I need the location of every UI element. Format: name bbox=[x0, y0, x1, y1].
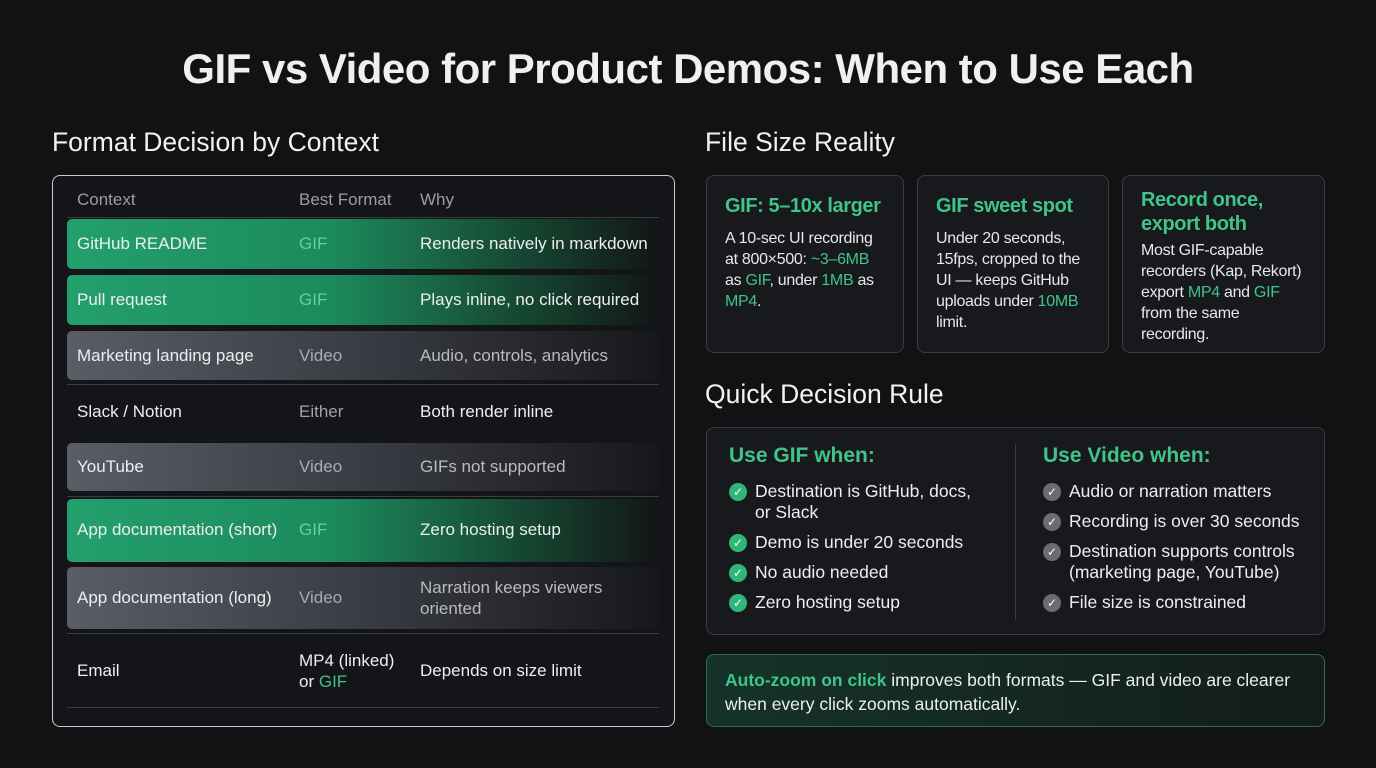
table header: Best Format bbox=[299, 190, 392, 209]
row: App documentation long: oriented bbox=[420, 599, 481, 618]
column: use GIF: Use GIF when: bbox=[729, 444, 875, 467]
card: GIF larger: MP4. bbox=[725, 293, 761, 310]
card: record once: Most GIF-capable bbox=[1141, 242, 1263, 259]
row: Marketing landing page: Video bbox=[299, 346, 342, 365]
row: Slack / Notion: Both render inline bbox=[420, 402, 553, 421]
card: GIF larger bbox=[706, 175, 904, 353]
row: App documentation long: Narration keeps viewers bbox=[420, 578, 602, 597]
column: use GIF: Zero hosting setup bbox=[755, 592, 900, 612]
row: App documentation long: App documentation (long) bbox=[77, 588, 272, 607]
row: Email: or GIF bbox=[299, 672, 347, 691]
column: use Video: Recording is over 30 seconds bbox=[1069, 511, 1300, 531]
column: use GIF: Demo is under 20 seconds bbox=[755, 532, 963, 552]
row: App documentation short: GIF bbox=[299, 520, 327, 539]
column: use GIF: Destination is GitHub, docs, bbox=[755, 481, 971, 501]
row: Marketing landing page bbox=[67, 331, 659, 380]
card: record once: recording. bbox=[1141, 326, 1209, 343]
row: GitHub README: GitHub README bbox=[77, 234, 207, 253]
card: GIF larger: GIF: 5–10x larger bbox=[725, 195, 881, 217]
column: use Video: (marketing page, YouTube) bbox=[1069, 562, 1279, 582]
card: GIF larger: A 10-sec UI recording bbox=[725, 230, 873, 247]
row: Slack / Notion: Slack / Notion bbox=[77, 402, 182, 421]
column: use GIF bbox=[729, 444, 971, 612]
row: Slack / Notion: Either bbox=[299, 402, 343, 421]
column: use Video: Use Video when: bbox=[1043, 444, 1211, 467]
row: GitHub README: GIF bbox=[299, 234, 327, 253]
card: GIF sweet spot: limit. bbox=[936, 314, 967, 331]
card: record once bbox=[1122, 175, 1325, 353]
row: Email: MP4 (linked) bbox=[299, 651, 394, 670]
card: record once: export both bbox=[1141, 213, 1247, 235]
card: GIF sweet spot: GIF sweet spot bbox=[936, 195, 1073, 217]
column: use GIF: No audio needed bbox=[755, 562, 888, 582]
row: Marketing landing page: Audio, controls, analytics bbox=[420, 346, 608, 365]
card: record once: from the same bbox=[1141, 305, 1239, 322]
row: Marketing landing page: Marketing landing page bbox=[77, 346, 254, 365]
column: use Video: ✓ bbox=[1047, 545, 1057, 559]
row: YouTube: GIFs not supported bbox=[420, 457, 566, 476]
card: GIF sweet spot: Under 20 seconds, bbox=[936, 230, 1065, 247]
row: App documentation short: Zero hosting setup bbox=[420, 520, 561, 539]
row: Pull request: GIF bbox=[299, 290, 327, 309]
row: GitHub README: Renders natively in markdown bbox=[420, 234, 648, 253]
card: GIF larger: as GIF, under 1MB as bbox=[725, 272, 874, 289]
column: use GIF: ✓ bbox=[733, 536, 743, 550]
column: use GIF: or Slack bbox=[755, 502, 818, 522]
row: Email bbox=[77, 651, 582, 691]
heading: quick decision rule: Quick Decision Rule bbox=[705, 379, 944, 409]
card: GIF sweet spot: 15fps, cropped to the bbox=[936, 251, 1080, 268]
row: Slack / Notion bbox=[77, 402, 553, 421]
column: use GIF: ✓ bbox=[733, 596, 743, 610]
table header: Context bbox=[77, 190, 136, 209]
column: use Video: ✓ bbox=[1047, 596, 1057, 610]
column: use Video: ✓ bbox=[1047, 515, 1057, 529]
column: use GIF: ✓ bbox=[733, 485, 743, 499]
column: use Video: Destination supports controls bbox=[1069, 541, 1295, 561]
row: YouTube bbox=[67, 443, 659, 491]
column: use Video bbox=[1043, 444, 1300, 612]
row: Pull request: Pull request bbox=[77, 290, 167, 309]
table header: Why bbox=[420, 190, 454, 209]
row: Pull request: Plays inline, no click required bbox=[420, 290, 639, 309]
row: App documentation long: Video bbox=[299, 588, 342, 607]
row: YouTube: Video bbox=[299, 457, 342, 476]
callout: auto-zoom: Auto-zoom on click improves both formats — GIF and video are clearer when every click zooms automatically. bbox=[725, 670, 1290, 714]
panel: decision rule bbox=[706, 427, 1325, 635]
card: GIF sweet spot bbox=[917, 175, 1109, 353]
column: use GIF: ✓ bbox=[733, 566, 743, 580]
card: GIF larger: at 800×500: ~3–6MB bbox=[725, 251, 869, 268]
row: Pull request bbox=[67, 275, 659, 325]
row: Email: Email bbox=[77, 661, 120, 680]
title: GIF vs Video for Product Demos: When to Use Each bbox=[182, 45, 1194, 92]
column: use Video: ✓ bbox=[1047, 485, 1057, 499]
card: record once: export MP4 and GIF bbox=[1141, 284, 1280, 301]
column: use Video: Audio or narration matters bbox=[1069, 481, 1271, 501]
panel: format table bbox=[52, 175, 675, 727]
row: Email: Depends on size limit bbox=[420, 661, 582, 680]
card: record once: recorders (Kap, Rekort) bbox=[1141, 263, 1301, 280]
heading: format decision: Format Decision by Context bbox=[52, 127, 379, 157]
row: GitHub README bbox=[67, 219, 659, 269]
column: use Video: File size is constrained bbox=[1069, 592, 1246, 612]
row: App documentation short: App documentation (short) bbox=[77, 520, 277, 539]
row: YouTube: YouTube bbox=[77, 457, 144, 476]
card: GIF sweet spot: uploads under 10MB bbox=[936, 293, 1078, 310]
row: App documentation short bbox=[67, 499, 659, 562]
heading: file size reality: File Size Reality bbox=[705, 127, 895, 157]
row: App documentation long bbox=[67, 567, 659, 629]
callout: auto-zoom bbox=[706, 654, 1325, 727]
table header bbox=[77, 190, 454, 209]
card: record once: Record once, bbox=[1141, 189, 1263, 211]
card: GIF sweet spot: UI — keeps GitHub bbox=[936, 272, 1069, 289]
